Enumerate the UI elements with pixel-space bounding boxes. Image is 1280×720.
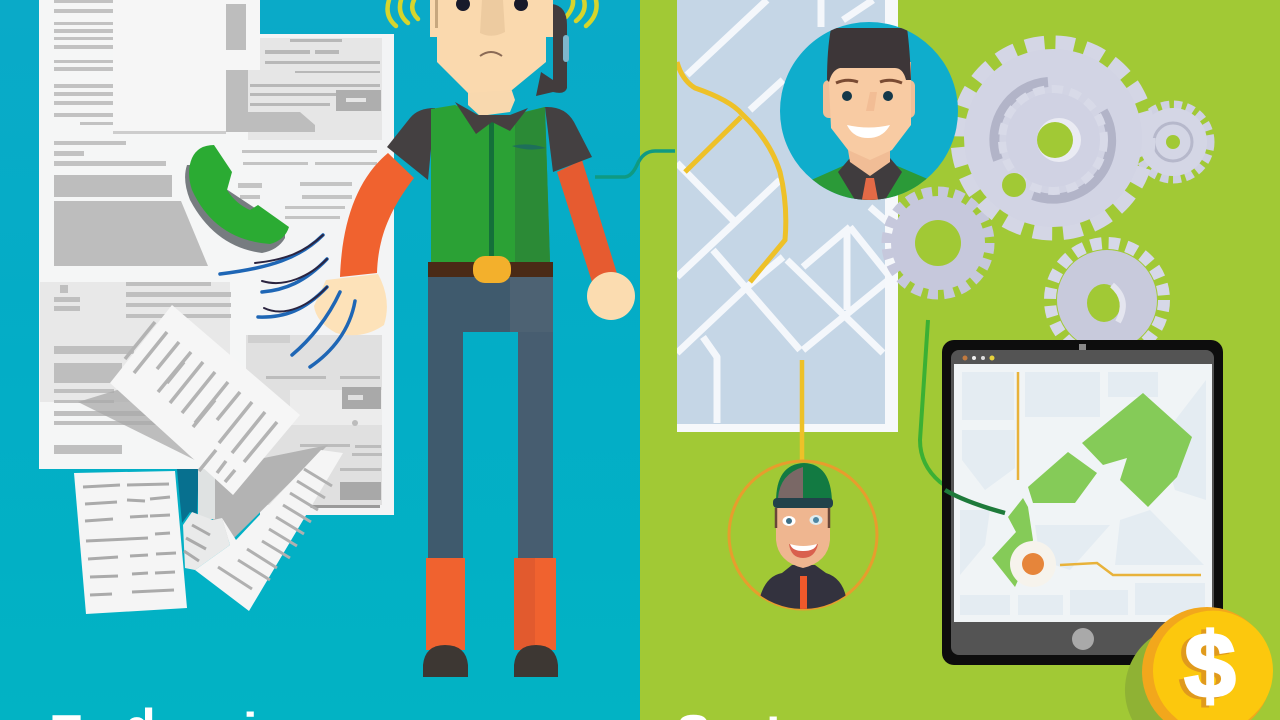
neck <box>468 85 515 116</box>
placket <box>489 122 494 262</box>
avatar: smiling worker in hard hat <box>729 461 877 612</box>
nose shade <box>866 92 877 111</box>
screen routes <box>1018 372 1201 575</box>
light paper edge <box>198 469 215 519</box>
loose paper: torn piece <box>183 512 230 570</box>
paper shadow lower <box>213 445 328 542</box>
trousers <box>428 277 553 558</box>
yellow route <box>677 62 786 282</box>
lower left form <box>40 282 231 454</box>
loose paper: tilted sheet <box>110 305 300 495</box>
neck <box>848 150 890 176</box>
sheet text lines <box>54 0 208 266</box>
headset <box>536 4 567 96</box>
face <box>828 62 911 160</box>
large paper sheet right <box>260 34 394 515</box>
blank overlay sheet <box>113 0 260 132</box>
pocket <box>512 144 546 150</box>
home button <box>1072 628 1094 650</box>
hat panel <box>778 467 803 498</box>
green zones <box>992 393 1192 587</box>
camera <box>1079 344 1086 350</box>
eyes <box>782 515 822 526</box>
heading right, cut off at bottom <box>676 705 780 720</box>
hair shadow left <box>435 0 438 28</box>
panel: left teal background <box>0 0 640 720</box>
sleeve right <box>545 107 592 172</box>
green wire into tablet <box>920 320 1005 513</box>
orange tie <box>800 576 807 610</box>
middle right sheet print <box>238 150 377 219</box>
belt buckle <box>473 256 511 283</box>
wire end on screen <box>945 490 1005 513</box>
motion lines by hand <box>220 235 355 367</box>
large paper sheet left <box>39 0 260 469</box>
paper shadow <box>78 386 235 470</box>
gears <box>887 43 1210 357</box>
gear large <box>958 43 1148 233</box>
tablet body <box>942 340 1223 665</box>
map panel <box>677 0 898 432</box>
left hand <box>314 274 387 335</box>
hard hat <box>776 463 832 502</box>
hat brim <box>773 498 833 508</box>
belt <box>428 262 553 277</box>
left eye <box>456 0 470 11</box>
avatar ring <box>729 461 877 609</box>
yellow route down to worker <box>800 360 804 462</box>
torso <box>760 565 846 612</box>
eyes <box>842 91 852 101</box>
dollar sign: $ <box>1184 615 1236 717</box>
avatar: smiling manager <box>780 22 958 205</box>
tie <box>862 178 878 200</box>
lower right form <box>246 335 382 508</box>
ears <box>823 80 915 118</box>
location pin <box>1010 541 1056 587</box>
connector line between panels <box>595 151 675 177</box>
document pile <box>39 0 394 614</box>
shirt <box>838 158 902 200</box>
right hand <box>587 272 635 320</box>
gear left <box>887 192 989 294</box>
gear right small <box>1136 105 1210 179</box>
right arm <box>557 160 619 282</box>
right shoe <box>514 645 558 677</box>
gear bottom <box>1050 243 1164 357</box>
face <box>430 0 553 93</box>
map roads <box>677 0 897 423</box>
icon: green phone handset <box>185 145 289 253</box>
coin edge <box>1142 607 1272 720</box>
legs <box>423 277 558 677</box>
headset detail <box>563 35 569 62</box>
face <box>776 505 830 568</box>
smile <box>789 544 818 558</box>
right boot shade <box>514 558 535 650</box>
signal waves left <box>388 0 418 26</box>
loose paper: table sheet <box>74 471 187 614</box>
coin shadow <box>1125 625 1255 720</box>
tablet inner bezel <box>951 350 1214 655</box>
left boot <box>426 558 465 650</box>
hair <box>827 28 911 82</box>
collar <box>455 102 528 134</box>
browser dots <box>962 356 994 360</box>
right eye <box>514 0 528 11</box>
map frame <box>677 0 898 432</box>
right leg tone <box>518 332 553 558</box>
signal waves right <box>566 0 597 26</box>
left shoe <box>423 645 468 677</box>
vest <box>431 105 550 262</box>
map base <box>677 0 898 432</box>
dollar shadow: $ <box>1179 617 1231 719</box>
head <box>430 0 553 116</box>
smile <box>847 125 890 138</box>
avatar circle <box>780 22 958 200</box>
sleeve left <box>387 108 435 180</box>
screen <box>954 364 1212 622</box>
nose <box>480 0 505 36</box>
grey bars beside blank sheet <box>113 4 315 134</box>
loose paper: folded sheet <box>195 450 343 611</box>
mouth <box>480 52 502 56</box>
coin face <box>1153 611 1273 720</box>
panel: right green background <box>640 0 1280 720</box>
trousers light side <box>510 277 553 332</box>
character: stressed field worker <box>314 0 635 677</box>
left arm <box>340 153 414 277</box>
right boot <box>514 558 556 650</box>
tablet with map <box>942 340 1223 665</box>
upper right sheet print <box>248 38 382 140</box>
vest shade <box>515 107 550 262</box>
icon: dollar coin <box>1125 607 1273 720</box>
gap in pile <box>177 469 198 523</box>
jacket <box>812 166 927 200</box>
hair sides <box>776 508 829 528</box>
heading left, cut off at bottom <box>49 700 257 720</box>
eyebrows <box>836 80 902 83</box>
screen map blocks <box>960 372 1206 615</box>
